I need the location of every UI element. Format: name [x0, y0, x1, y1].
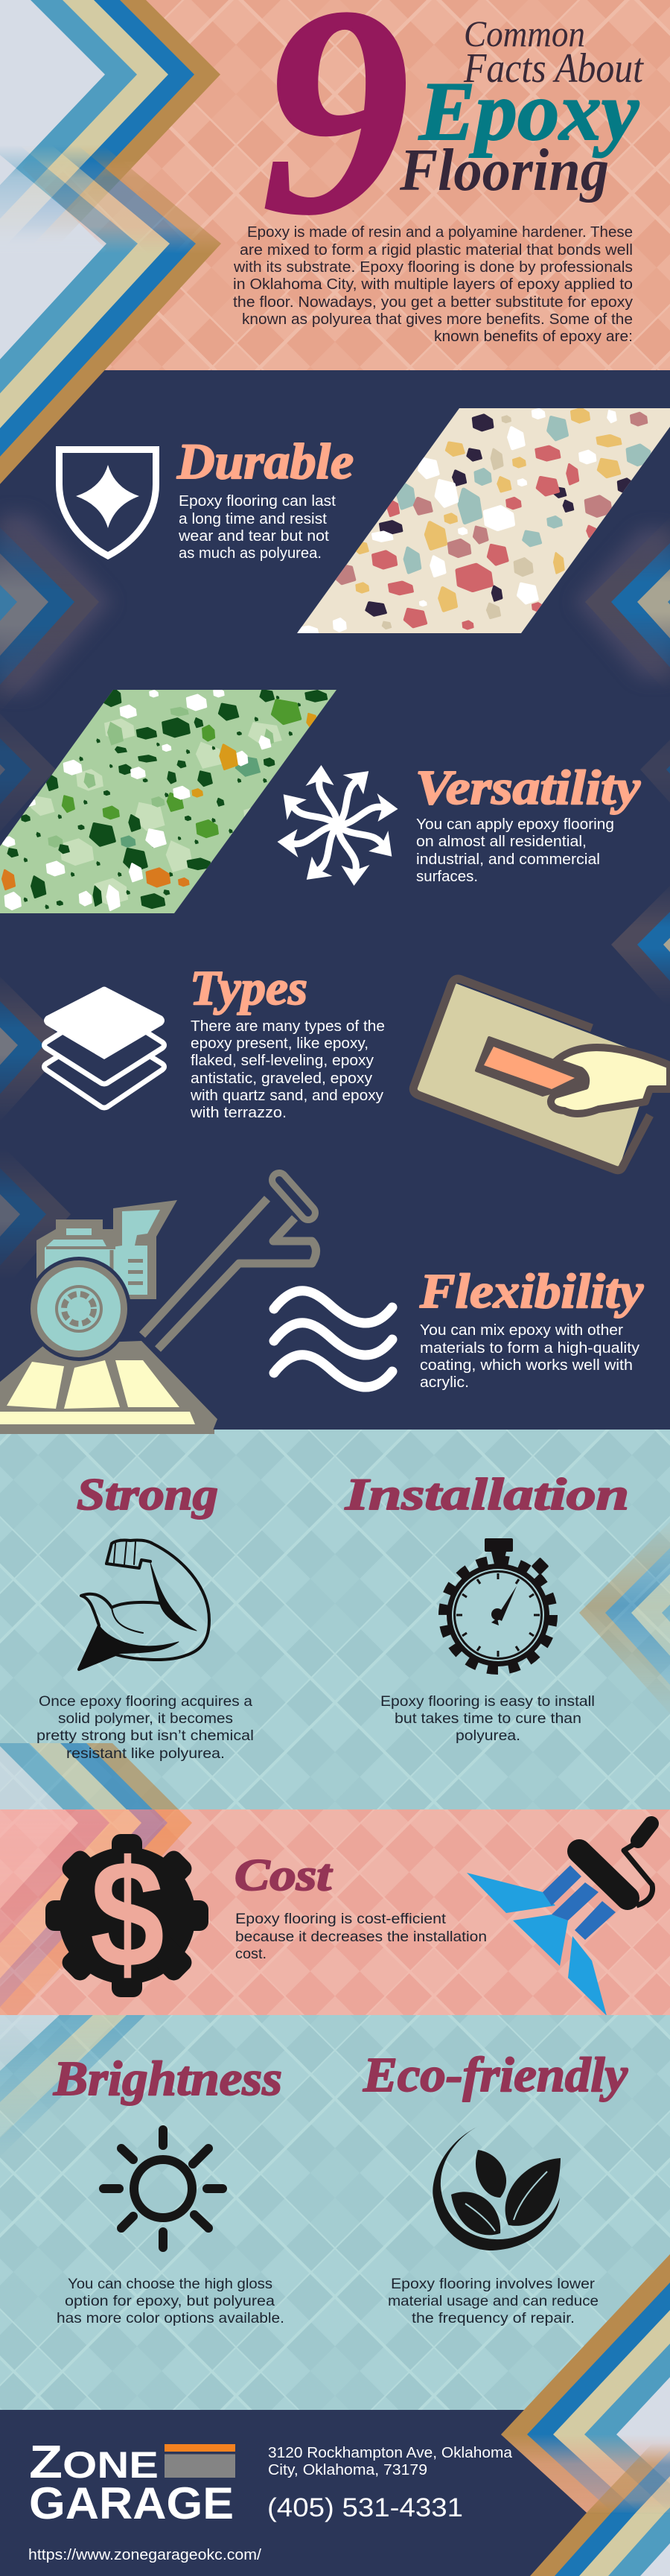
heading: flexibility: Flexibility: [419, 1264, 644, 1319]
text: cost body: cost.: [235, 1946, 267, 1962]
heading: brightness: Brightness: [53, 2052, 282, 2106]
text: strong body: [36, 1693, 254, 1762]
text: types body: flaked, self-leveling, epoxy: [191, 1052, 374, 1069]
text: versatility body: You can apply epoxy flooring: [416, 816, 614, 833]
text: strong body: solid polymer, it becomes: [58, 1710, 233, 1727]
text: cost body: because it decreases the installation: [235, 1929, 487, 1945]
text: installation body: polyurea.: [456, 1728, 520, 1744]
text: installation body: [380, 1693, 595, 1744]
heading: epoxy: Epoxy: [418, 66, 639, 158]
trowel handle: [476, 1038, 585, 1095]
text: eco-friendly body: material usage and can reduce: [388, 2293, 599, 2309]
image: green terrazzo: [0, 685, 342, 916]
heading: eco-friendly: Eco-friendly: [363, 2048, 628, 2102]
panel: pink band: [0, 1809, 670, 2015]
heading: cost: Cost: [234, 1850, 334, 1900]
text: versatility body: industrial, and commercial: [416, 851, 600, 868]
handle: [142, 1180, 316, 1349]
heading: common facts about: Facts About: [463, 45, 644, 92]
icon: leaves: [433, 2126, 561, 2250]
text: address: [268, 2444, 513, 2478]
text: flexibility body: [420, 1322, 640, 1391]
wheel housing: [27, 1257, 131, 1361]
text: versatility body: surfaces.: [416, 868, 478, 885]
icon: versatility arrows: [272, 760, 403, 891]
text: flexibility body: acrylic.: [420, 1374, 469, 1391]
text: installation body: Epoxy flooring is easy to install: [380, 1693, 595, 1710]
text: flexibility body: You can mix epoxy with other: [420, 1322, 623, 1339]
text: eco-friendly body: Epoxy flooring involves lower: [391, 2276, 596, 2292]
icon: layers: [44, 986, 165, 1108]
panel: teal band two: [0, 2015, 670, 2410]
text: intro paragraph: in Oklahoma City, with multiple layers of epoxy applied to: [233, 276, 633, 293]
text: flexibility body: materials to form a high-quality: [420, 1339, 640, 1357]
logo: zone garage: GARAGE: [29, 2478, 234, 2528]
heading: common facts about: [463, 13, 644, 92]
heading: types: Types: [190, 961, 307, 1015]
base pad: [0, 1341, 217, 1434]
text: types body: with terrazzo.: [190, 1104, 287, 1121]
text: brightness body: You can choose the high gloss: [68, 2276, 272, 2292]
panel: footer: [501, 2254, 670, 2576]
heading: installation: Installation: [345, 1470, 629, 1519]
text: durable body: a long time and resist: [179, 510, 327, 527]
icon: floor grinder machine: [0, 1180, 316, 1434]
icon: stopwatch gear: [444, 1538, 552, 1669]
text: intro paragraph: the floor. Nowadays, you get a better substitute for epoxy: [233, 294, 634, 311]
text: intro paragraph: known benefits of epoxy are:: [434, 328, 633, 345]
text: types body: antistatic, graveled, epoxy: [191, 1070, 373, 1087]
text: intro paragraph: [233, 223, 634, 345]
panel: teal band one: [0, 1430, 670, 1809]
panel: left chevron ribbons: [0, 0, 221, 484]
heading: strong: Strong: [77, 1470, 218, 1519]
text: types body: epoxy present, like epoxy,: [191, 1035, 368, 1052]
icon: gear with dollar: $: [90, 1829, 165, 1999]
text: website: https://www.zonegarageokc.com/: [28, 2546, 261, 2563]
icon: paint roller: [467, 1824, 653, 2016]
engine block: [36, 1200, 177, 1299]
heading: durable: Durable: [176, 433, 354, 489]
panel: navy dim chevrons: [0, 378, 670, 1438]
text: brightness body: has more color options available.: [57, 2310, 284, 2326]
text: types body: There are many types of the: [191, 1018, 385, 1035]
image: beige terrazzo: [290, 402, 670, 641]
text: strong body: resistant like polyurea.: [66, 1745, 225, 1762]
text: strong body: pretty strong but isn’t chemical: [36, 1728, 254, 1744]
text: durable body: wear and tear but not: [178, 527, 329, 545]
text: cost body: [235, 1911, 487, 1962]
text: types body: with quartz sand, and epoxy: [190, 1087, 384, 1104]
heading: versatility: Versatility: [415, 761, 641, 815]
text: address: 3120 Rockhampton Ave, Oklahoma: [268, 2444, 513, 2461]
text: flexibility body: coating, which works well with: [420, 1357, 633, 1374]
heading: common facts about: Common: [464, 13, 585, 54]
hand: [551, 1047, 670, 1114]
icon: sun: [103, 2130, 223, 2247]
text: intro paragraph: with its substrate. Epoxy flooring is done by professionals: [233, 258, 633, 276]
logo: zone garage: ZONE: [29, 2437, 159, 2488]
text: eco-friendly body: [388, 2276, 599, 2326]
logo: zone garage: [29, 2437, 235, 2528]
icon: flexed arm: [79, 1541, 209, 1669]
text: strong body: Once epoxy flooring acquires a: [39, 1693, 252, 1710]
text: versatility body: [416, 816, 614, 885]
text: intro paragraph: are mixed to form a rigid plastic material that bonds well: [240, 241, 633, 258]
text: versatility body: on almost all residential,: [416, 833, 587, 850]
heading: flooring: Flooring: [399, 138, 609, 203]
text: durable body: as much as polyurea.: [179, 545, 322, 562]
text: phone: (405) 531-4331: [267, 2493, 463, 2522]
icon: shield: [60, 450, 156, 556]
panel: header background: [0, 0, 670, 1430]
text: intro paragraph: Epoxy is made of resin and a polyamine hardener. These: [247, 223, 633, 241]
text: durable body: [178, 492, 336, 562]
text: brightness body: option for epoxy, but polyurea: [65, 2293, 275, 2309]
text: cost body: Epoxy flooring is cost-efficient: [235, 1911, 447, 1927]
icon: waves: [274, 1291, 392, 1387]
icon: gear with dollar: [45, 1829, 208, 1999]
text: brightness body: [57, 2276, 284, 2326]
text: types body: [190, 1018, 385, 1121]
text: intro paragraph: known as polyurea that gives more benefits. Some of the: [242, 311, 633, 328]
text: address: City, Oklahoma, 73179: [268, 2461, 427, 2478]
icon: trowel and hand: [413, 979, 670, 1170]
text: eco-friendly body: the frequency of repair.: [412, 2310, 575, 2326]
text: durable body: Epoxy flooring can last: [179, 492, 336, 510]
text: installation body: but takes time to cure than: [395, 1710, 581, 1727]
